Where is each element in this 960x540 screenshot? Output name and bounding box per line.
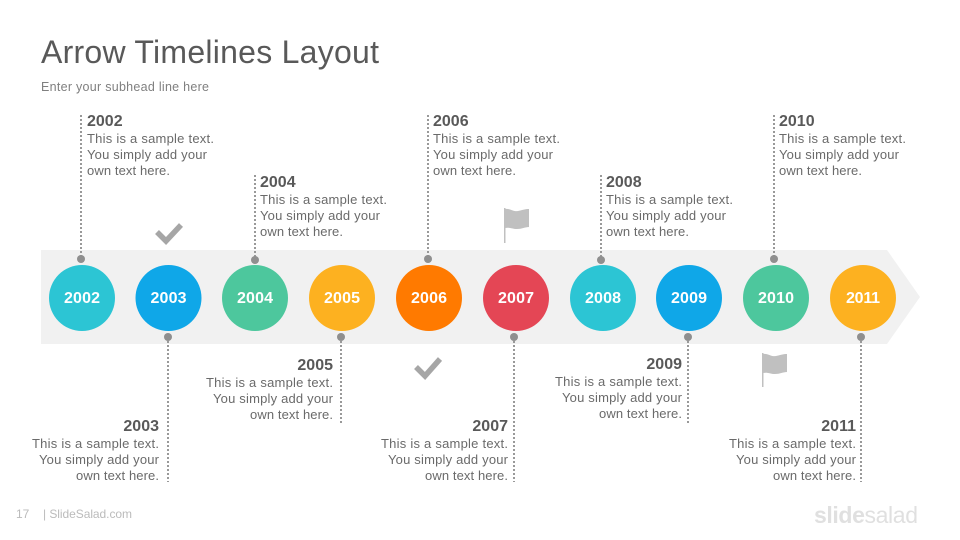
- callout 2008: own text here.: [606, 224, 689, 239]
- icon: flag top: [504, 208, 529, 243]
- timeline circles: [49, 265, 896, 331]
- callout 2011: 2011: [821, 418, 856, 435]
- callout 2010: You simply add your: [779, 147, 900, 162]
- callout 2009: This is a sample text.: [555, 374, 682, 389]
- callout 2006: 2006: [433, 113, 469, 130]
- callout 2003: You simply add your: [39, 452, 160, 467]
- callout 2009: 2009: [646, 356, 682, 373]
- callout 2003: 2003: [123, 418, 159, 435]
- circle 2003: 2003: [150, 290, 187, 307]
- subhead: Enter your subhead line here: [41, 80, 209, 94]
- circle 2003: [136, 265, 202, 331]
- arrow band: [41, 250, 920, 344]
- callout 2007: own text here.: [425, 468, 508, 483]
- callout 2007: [381, 333, 518, 483]
- callout 2010: [770, 113, 906, 263]
- callout 2004: own text here.: [260, 224, 343, 239]
- circle 2009: 2009: [671, 290, 707, 307]
- callout 2006: [424, 113, 560, 263]
- callout 2010: This is a sample text.: [779, 131, 906, 146]
- callout 2003: This is a sample text.: [32, 436, 159, 451]
- callout 2006: This is a sample text.: [433, 131, 560, 146]
- callout 2009: [555, 333, 692, 424]
- circle 2005: 2005: [324, 290, 360, 307]
- circle 2007: 2007: [498, 290, 534, 307]
- callout 2003: [32, 333, 172, 483]
- circle 2007: [483, 265, 549, 331]
- circle 2008: 2008: [585, 290, 621, 307]
- callout 2002: own text here.: [87, 163, 170, 178]
- callout 2003: own text here.: [76, 468, 159, 483]
- callout 2002: [77, 113, 214, 263]
- callout 2011: You simply add your: [736, 452, 857, 467]
- callout 2011: [729, 333, 865, 483]
- callout 2005: This is a sample text.: [206, 375, 333, 390]
- callout 2008: You simply add your: [606, 208, 727, 223]
- callout 2005: [206, 333, 345, 424]
- circle 2002: [49, 265, 115, 331]
- callout 2008: [597, 174, 733, 264]
- callout 2005: 2005: [297, 357, 333, 374]
- callout 2008: 2008: [606, 174, 642, 191]
- callout 2006: You simply add your: [433, 147, 554, 162]
- circle 2005: [309, 265, 375, 331]
- callout 2011: own text here.: [773, 468, 856, 483]
- callout 2002: You simply add your: [87, 147, 208, 162]
- icon: check mark top: [157, 225, 181, 241]
- circle 2006: 2006: [411, 290, 447, 307]
- icon: flag bottom: [762, 353, 787, 387]
- callout 2010: 2010: [779, 113, 815, 130]
- callout 2011: This is a sample text.: [729, 436, 856, 451]
- footer site name: | SlideSalad.com: [43, 507, 132, 521]
- circle 2004: 2004: [237, 290, 273, 307]
- callout 2004: 2004: [260, 174, 296, 191]
- callout 2009: own text here.: [599, 406, 682, 421]
- callout 2010: own text here.: [779, 163, 862, 178]
- callout 2007: 2007: [472, 418, 508, 435]
- callout 2009: You simply add your: [562, 390, 683, 405]
- callout 2002: 2002: [87, 113, 123, 130]
- callout 2004: You simply add your: [260, 208, 381, 223]
- icon: check mark bottom: [416, 359, 440, 376]
- callout 2006: own text here.: [433, 163, 516, 178]
- circle 2011: 2011: [846, 290, 880, 307]
- callout 2004: This is a sample text.: [260, 192, 387, 207]
- circle 2004: [222, 265, 288, 331]
- callout 2007: This is a sample text.: [381, 436, 508, 451]
- page number: 17: [16, 507, 30, 521]
- title: Arrow Timelines Layout: [41, 34, 379, 70]
- callout 2008: This is a sample text.: [606, 192, 733, 207]
- callout 2007: You simply add your: [388, 452, 509, 467]
- logo wordmark: slidesalad: [814, 502, 918, 528]
- callout 2002: This is a sample text.: [87, 131, 214, 146]
- callout 2004: [251, 174, 387, 264]
- circle 2002: 2002: [64, 290, 100, 307]
- circle 2006: [396, 265, 462, 331]
- circle 2010: [743, 265, 809, 331]
- circle 2008: [570, 265, 636, 331]
- callout 2005: own text here.: [250, 407, 333, 422]
- callout 2005: You simply add your: [213, 391, 334, 406]
- circle 2011: [830, 265, 896, 331]
- circle 2010: 2010: [758, 290, 794, 307]
- circle 2009: [656, 265, 722, 331]
